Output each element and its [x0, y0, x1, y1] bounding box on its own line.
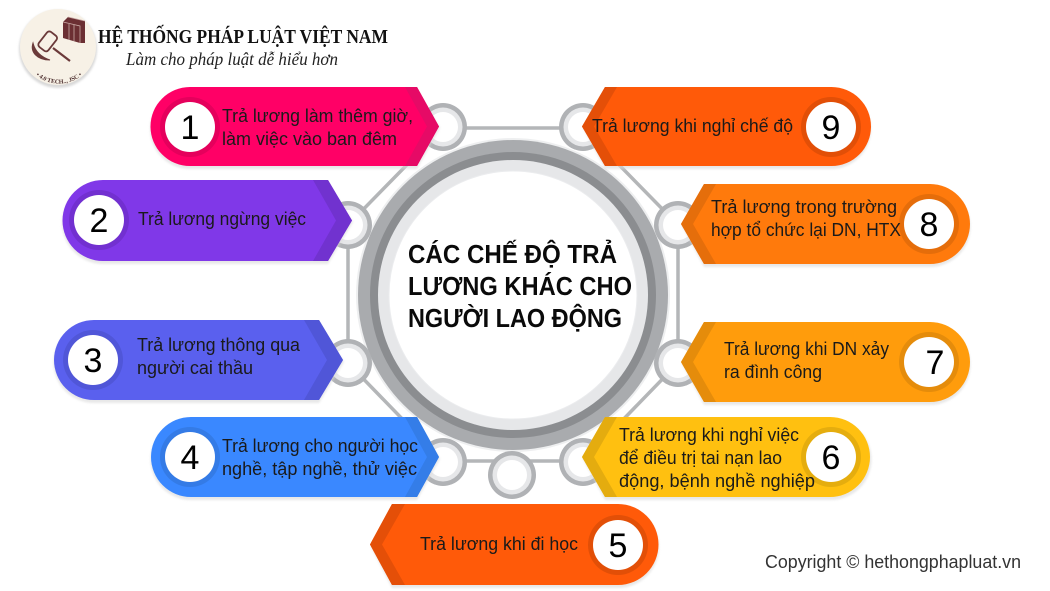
item 4: 4	[181, 439, 199, 477]
icon: books	[63, 17, 85, 43]
title	[408, 239, 632, 333]
item 9: Trả lương khi nghỉ chế độ	[592, 116, 793, 136]
icon: gavel	[32, 30, 70, 61]
item 1: 1	[181, 109, 199, 147]
item 4: Trả lương cho người học	[222, 436, 418, 456]
item 8: 8	[920, 206, 938, 244]
item 3: người cai thầu	[137, 358, 253, 378]
connector octagon	[348, 128, 678, 461]
item 3: 3	[84, 342, 102, 380]
title: NGƯỜI LAO ĐỘNG	[408, 303, 622, 333]
item 6: Trả lương khi nghỉ việc	[619, 425, 799, 445]
item 2	[62, 180, 353, 264]
item 8: hợp tổ chức lại DN, HTX	[711, 220, 901, 240]
item 1: Trả lương làm thêm giờ,	[222, 106, 413, 126]
item 8	[681, 184, 970, 267]
item 1: làm việc vào ban đêm	[222, 129, 397, 149]
item 7: Trả lương khi DN xảy	[724, 339, 889, 359]
item 2: 2	[90, 202, 108, 240]
item 4: nghề, tập nghề, thử việc	[222, 459, 417, 479]
item 6: 6	[822, 439, 840, 477]
item 7	[681, 322, 970, 405]
item 7: ra đình công	[724, 362, 822, 382]
title: LƯƠNG KHÁC CHO	[408, 271, 632, 301]
item 8: Trả lương trong trường	[711, 197, 897, 217]
item 5: Trả lương khi đi học	[420, 534, 578, 554]
connector nodes	[324, 103, 702, 499]
item 9	[582, 87, 871, 169]
logo: law firm emblem	[18, 9, 98, 89]
item 3	[54, 320, 344, 403]
item 6: để điều trị tai nạn lao	[619, 448, 782, 468]
item 1	[150, 87, 440, 169]
logo caption: • 4.0 TECH.., JSC •	[37, 74, 81, 84]
item 5	[370, 504, 659, 588]
site name: HỆ THỐNG PHÁP LUẬT VIỆT NAM	[98, 24, 388, 48]
item 4	[150, 417, 440, 500]
item 9: 9	[822, 109, 840, 147]
item 3: Trả lương thông qua	[137, 335, 301, 355]
item 5: 5	[609, 527, 627, 565]
item 7: 7	[926, 344, 944, 382]
item 2: Trả lương ngừng việc	[138, 209, 306, 229]
site slogan: Làm cho pháp luật dễ hiểu hơn	[125, 49, 338, 69]
item 6	[582, 417, 872, 500]
item 6: động, bệnh nghề nghiệp	[619, 471, 815, 491]
title: CÁC CHẾ ĐỘ TRẢ	[408, 239, 617, 269]
copyright: Copyright © hethongphapluat.vn	[765, 552, 1021, 572]
central ring with title	[356, 138, 670, 452]
